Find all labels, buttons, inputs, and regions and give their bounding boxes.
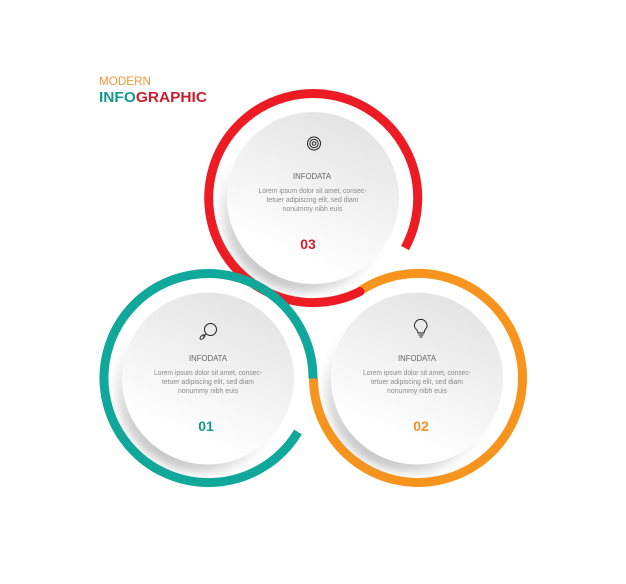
text block: description 01: Lorem ipsum dolor sit amet, consec- xyxy=(154,370,263,377)
panel: step 01 xyxy=(116,292,294,472)
text block: description 03: nonummy nibh euis xyxy=(282,206,343,213)
panel: step 03 xyxy=(221,112,399,292)
icon: light bulb xyxy=(414,319,427,337)
ring: teal step 01 xyxy=(104,274,313,483)
number 03: 03 xyxy=(300,236,316,252)
text block: description 01: tetuer adipiscing elit, sed diam xyxy=(162,379,254,386)
title xyxy=(99,74,208,106)
icon: magnifier xyxy=(199,324,216,340)
ring: orange step 02 xyxy=(314,273,522,482)
title: MODERN xyxy=(99,74,151,88)
panel: step 02 xyxy=(325,292,503,472)
text block: description 03: tetuer adipiscing elit, sed diam xyxy=(266,197,359,204)
heading: infodata 01: INFODATA xyxy=(189,353,227,363)
text block: description 02: Lorem ipsum dolor sit amet, consec- xyxy=(363,370,472,377)
heading: infodata 02: INFODATA xyxy=(398,353,436,363)
title: INFOGRAPHIC xyxy=(99,90,208,106)
text block: description 02: nonummy nibh euis xyxy=(387,388,447,395)
text block: description 01: nonummy nibh euis xyxy=(178,388,238,395)
icon: target xyxy=(308,137,320,150)
text block: description 03: Lorem ipsum dolor sit amet, consec- xyxy=(258,188,367,195)
number 01: 01 xyxy=(198,418,214,434)
ring: red step 03 xyxy=(209,94,418,303)
heading: infodata 03: INFODATA xyxy=(293,171,331,181)
text block: description 02: tetuer adipiscing elit, sed diam xyxy=(371,379,463,386)
number 02: 02 xyxy=(413,418,429,434)
text block: description 03 xyxy=(258,188,367,213)
text block: description 02 xyxy=(363,370,472,395)
text block: description 01 xyxy=(154,370,263,395)
